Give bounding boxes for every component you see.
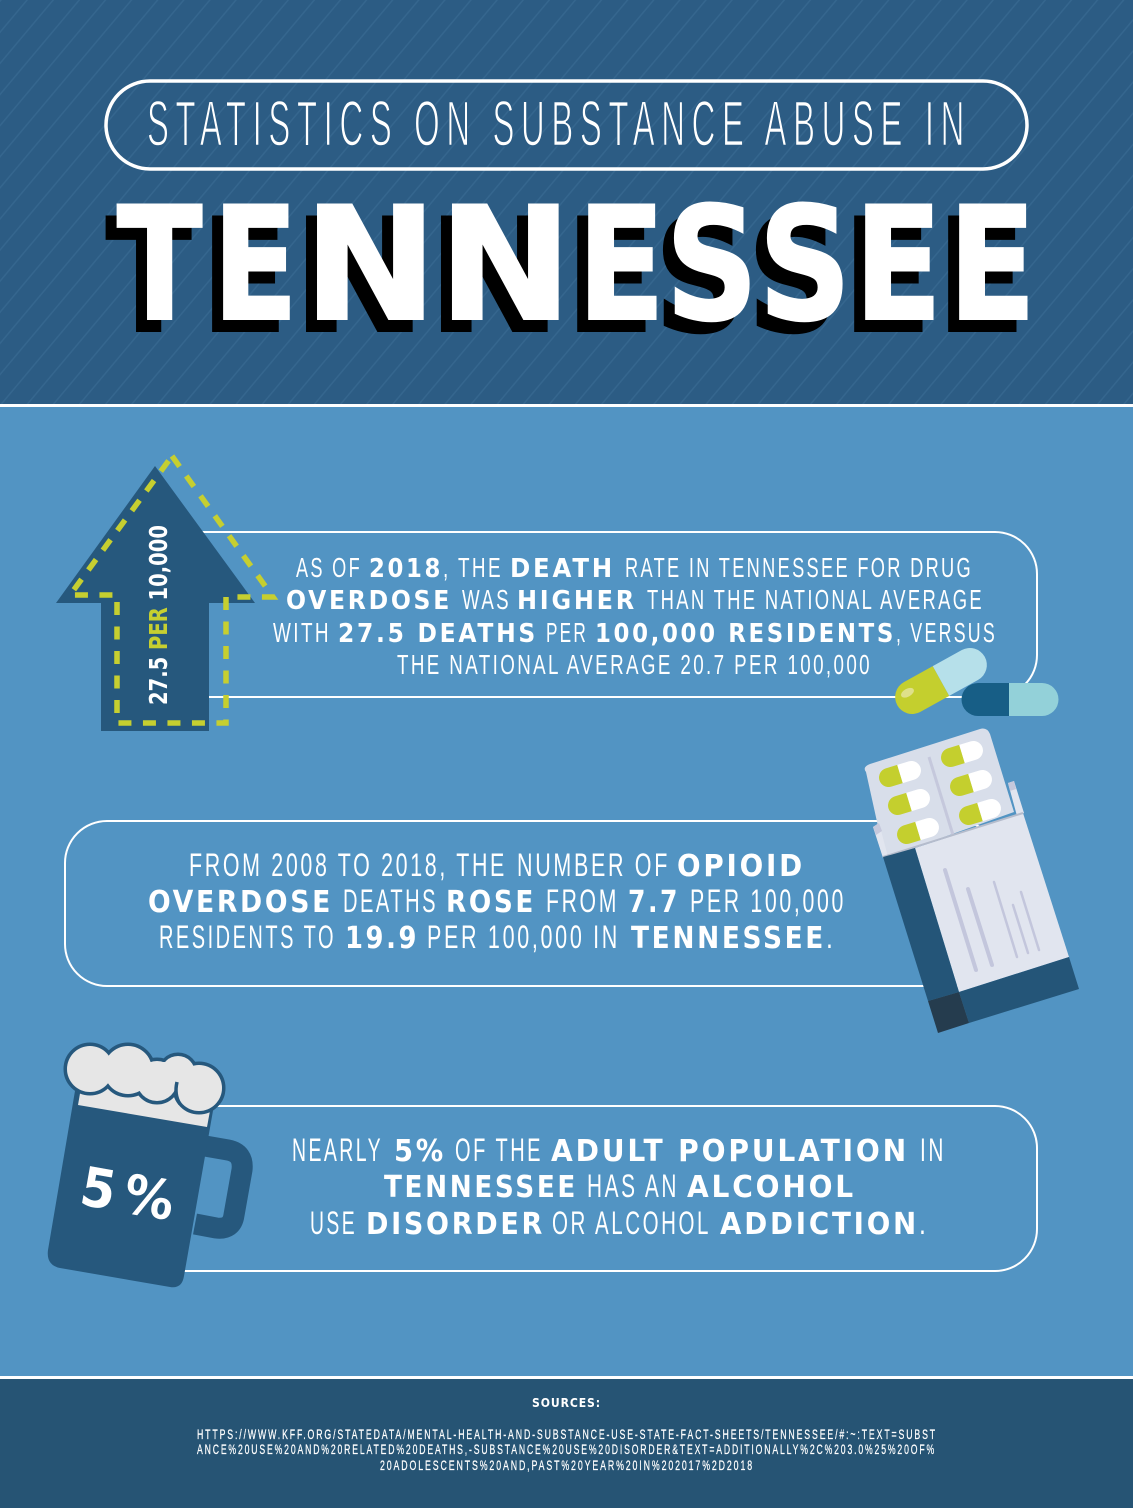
opioid text: . — [826, 919, 836, 955]
alcohol text: . — [919, 1205, 929, 1241]
opioid text: FROM — [546, 883, 619, 919]
opioid text: 7.7 — [628, 885, 680, 920]
death rate text: OVERDOSE — [286, 586, 452, 616]
title: Tennessee: TE — [117, 173, 298, 357]
alcohol text: USE — [310, 1205, 357, 1241]
footer: sources — [0, 1376, 1133, 1508]
opioid text: OVERDOSE — [148, 885, 333, 920]
death rate text: 27.5 DEATHS — [338, 619, 538, 649]
beer foam — [67, 1046, 222, 1111]
death rate text: PER — [546, 617, 588, 648]
panel: death rate — [56, 456, 1059, 731]
sources url: 20ADOLESCENTS%20AND,PAST%20YEAR%20IN%202017%2D2018 — [380, 1457, 754, 1473]
death rate text: THE NATIONAL AVERAGE 20.7 PER 100,000 — [397, 649, 872, 680]
panel: alcohol use — [48, 1046, 1037, 1287]
alcohol text: HAS AN — [587, 1168, 679, 1204]
title: Tennessee: NN — [303, 174, 572, 357]
icon: beer mug — [48, 1046, 242, 1287]
opioid text: FROM 2008 TO 2018, THE — [189, 847, 507, 883]
death rate text: , THE — [443, 552, 503, 583]
alcohol text: ADDICTION — [720, 1207, 919, 1242]
sources url — [197, 1426, 937, 1473]
alcohol text: TENNESSEE — [384, 1170, 578, 1205]
opioid text: NUMBER OF — [517, 847, 670, 883]
opioid text: RESIDENTS TO — [159, 919, 336, 955]
opioid text — [148, 847, 846, 956]
header panel — [0, 0, 1133, 407]
opioid text: 19.9 — [345, 921, 419, 956]
title: Tennessee: ESSEE — [577, 174, 1036, 356]
death rate text: AS OF — [296, 552, 362, 583]
alcohol text: DISORDER — [366, 1207, 545, 1242]
death rate text: WAS — [462, 584, 511, 615]
panel: opioid overdose — [65, 729, 1079, 1033]
alcohol text: NEARLY — [292, 1132, 383, 1168]
death rate text — [273, 552, 997, 680]
opioid text: PER 100,000 — [690, 883, 846, 919]
alcohol text: ADULT POPULATION — [551, 1134, 909, 1169]
icon: blister pack and box — [865, 729, 1079, 1033]
icon: capsules — [889, 642, 1059, 720]
alcohol text: 5% — [394, 1134, 446, 1169]
alcohol text — [292, 1132, 946, 1242]
death rate text: 100,000 RESIDENTS — [595, 619, 896, 649]
opioid text: PER 100,000 IN — [427, 919, 620, 955]
opioid text: OPIOID — [677, 849, 805, 884]
sources heading: SOURCES: — [532, 1396, 601, 1410]
alcohol text: OR ALCOHOL — [552, 1205, 711, 1241]
title: Tennessee — [117, 173, 1036, 357]
death rate text: DEATH — [510, 554, 615, 584]
alcohol text: ALCOHOL — [687, 1170, 856, 1205]
icon: up arrow — [56, 456, 273, 731]
opioid text: TENNESSEE — [631, 921, 826, 956]
alcohol text: OF THE — [455, 1132, 543, 1168]
icon: beer mug: 5 % — [76, 1155, 179, 1233]
opioid text: DEATHS — [343, 883, 438, 919]
icon: up arrow: 27.5 PER 10,000 — [144, 525, 173, 705]
opioid text: ROSE — [446, 885, 536, 920]
alcohol text: IN — [920, 1132, 946, 1168]
death rate text: WITH — [273, 617, 331, 648]
death rate text: , VERSUS — [896, 617, 997, 648]
death rate text: HIGHER — [517, 586, 637, 616]
death rate text: 2018 — [369, 554, 443, 584]
